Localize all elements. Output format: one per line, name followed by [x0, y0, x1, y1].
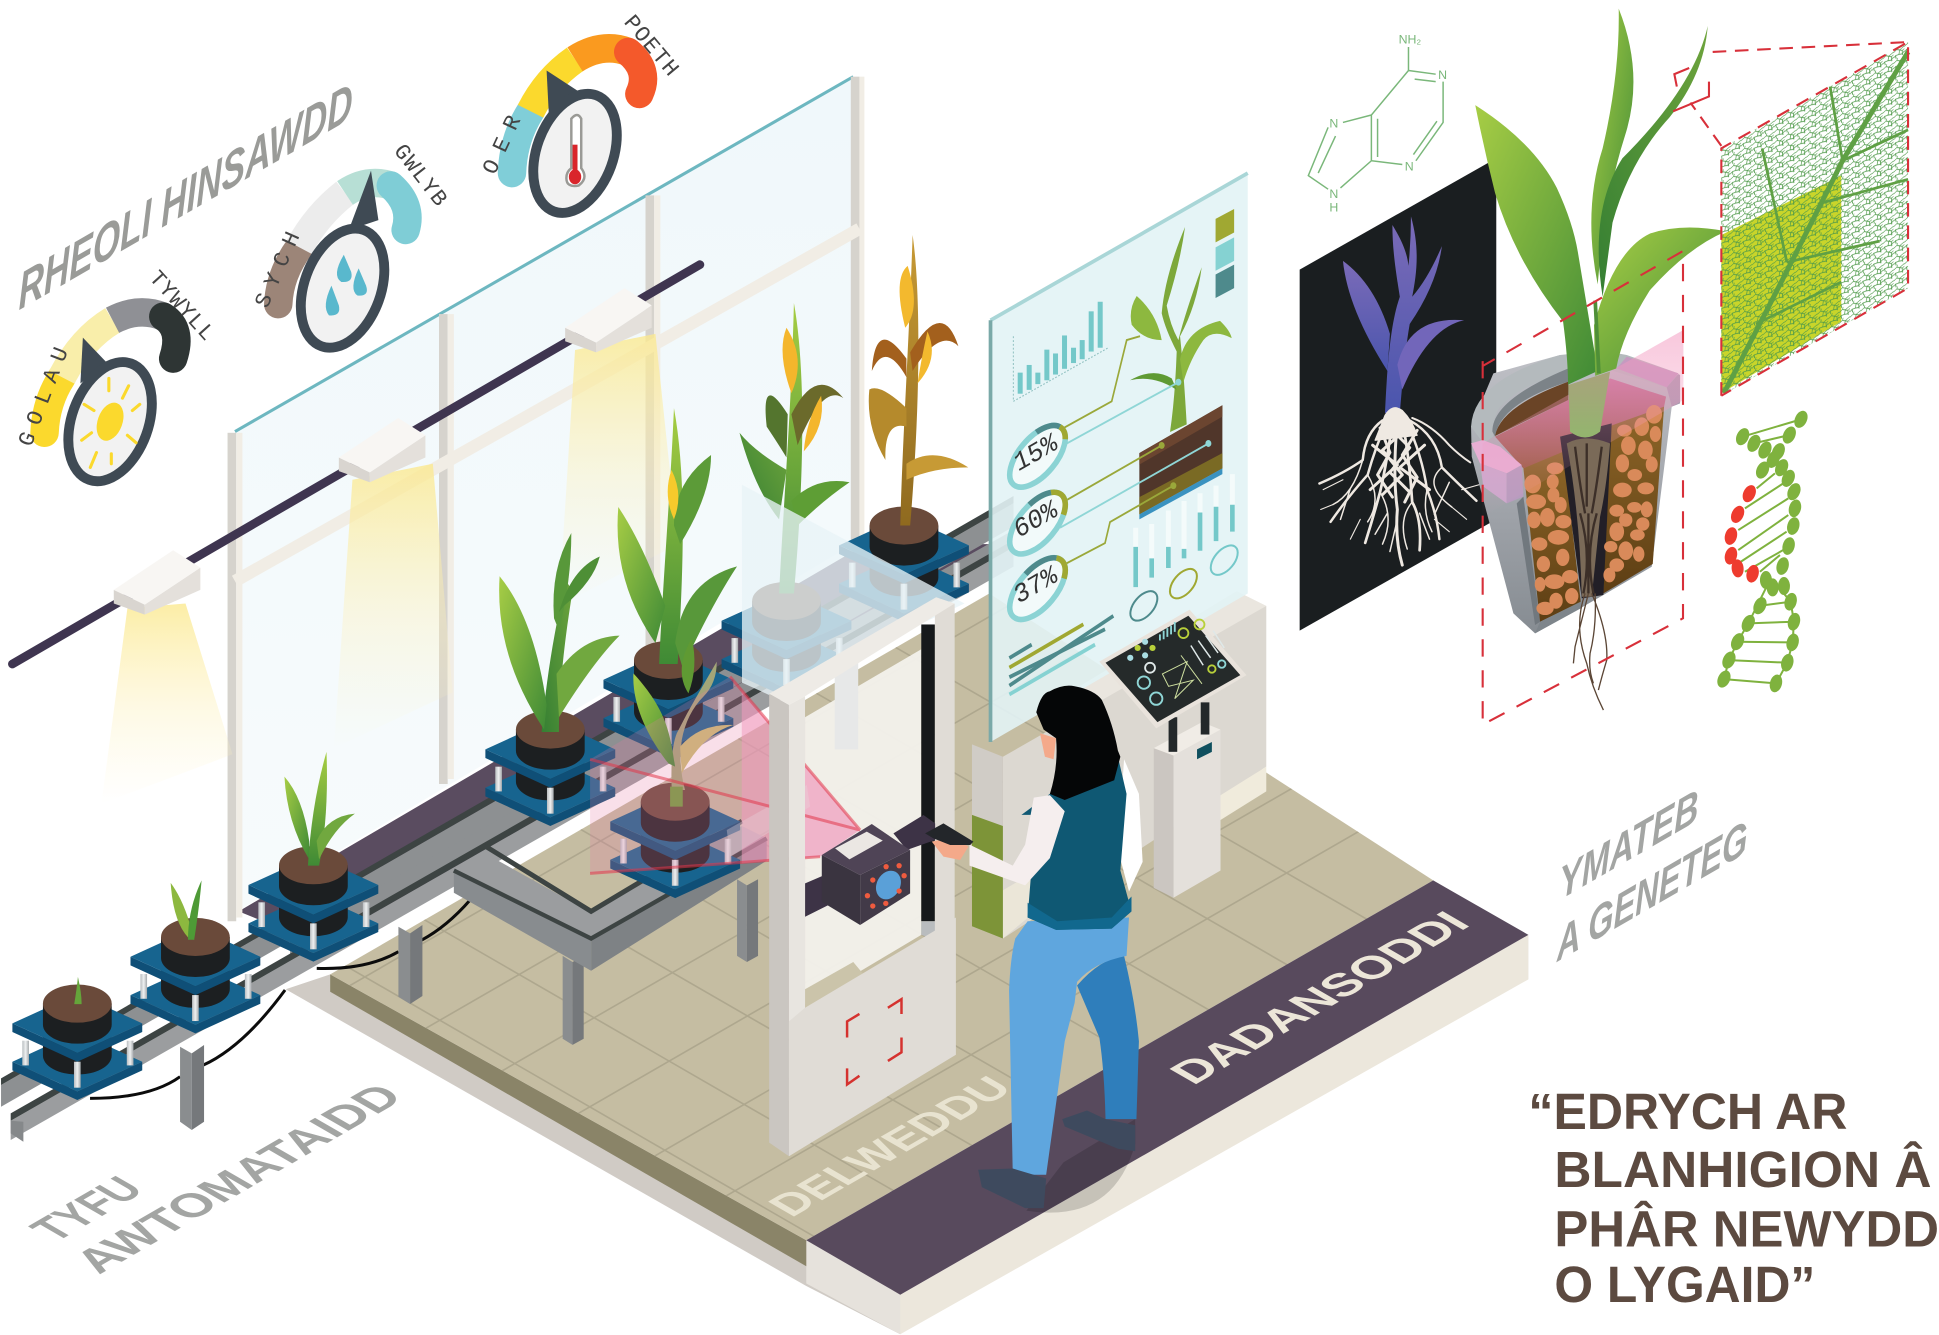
tablet — [1099, 610, 1246, 728]
lamp 3 — [565, 288, 652, 352]
scanner opening — [805, 649, 921, 1008]
scan corner marks — [847, 999, 901, 1084]
lamp 2 — [339, 418, 425, 482]
person — [925, 686, 1143, 1213]
leaf microscopy view — [1673, 42, 1908, 396]
scanner gate — [769, 597, 956, 1156]
plant stand 7 with dried plant — [839, 235, 969, 622]
level bars — [1136, 474, 1232, 587]
donut 37% — [999, 548, 1076, 629]
gauge label: GWLYB: GWLYB — [388, 139, 452, 212]
main plant leaves — [1475, 9, 1726, 385]
cutaway pot — [1471, 330, 1683, 710]
molecule: adenine: N — [1329, 187, 1338, 201]
screen plant — [1130, 227, 1232, 432]
vest — [1021, 757, 1131, 930]
right leg — [1077, 956, 1139, 1119]
hand and device — [925, 823, 973, 860]
quote: PHÂR NEWYDD — [1554, 1200, 1939, 1257]
donut 37%: 37% — [1008, 560, 1065, 610]
imaged plant stand — [610, 638, 740, 898]
donut 15%: 15% — [1008, 428, 1065, 478]
dark imaging panel — [1300, 158, 1496, 631]
leg 2 — [398, 925, 422, 1004]
lamp 1 — [114, 550, 200, 615]
gauge label: SYCH: SYCH — [250, 228, 306, 312]
plant stand 6 with maturing plant — [722, 303, 851, 697]
root mass — [1567, 438, 1610, 710]
back rail — [1, 496, 1014, 1107]
gauge: light — [45, 312, 176, 493]
light beams — [101, 334, 678, 804]
window wall — [228, 77, 1014, 946]
floor tiles — [344, 616, 1367, 1236]
arm — [970, 795, 1065, 885]
hair — [1036, 686, 1120, 800]
label: TYFU AWTOMATAIDD: AWTOMATAIDD — [62, 1077, 414, 1280]
quote — [1528, 1083, 1939, 1313]
gauge label: TYWYLL: TYWYLL — [143, 266, 220, 346]
molecule: adenine: N — [1438, 68, 1447, 82]
connector lines — [1060, 336, 1208, 564]
donut 15% — [999, 416, 1076, 497]
molecule: adenine: NH₂ — [1399, 32, 1421, 46]
gauge label: OER: OER — [477, 112, 527, 179]
camera — [805, 815, 935, 925]
label: YMATEB A GENETEG: YMATEB — [1559, 779, 1699, 910]
gauge: temperature — [512, 48, 643, 225]
back block — [972, 591, 1266, 939]
bar chart — [1013, 302, 1108, 401]
floor label: DELWEDDU: DELWEDDU — [759, 1070, 1023, 1223]
molecule: adenine — [1308, 32, 1447, 214]
front rail — [11, 540, 1014, 1142]
pebbles — [1524, 405, 1662, 615]
DNA helix — [1715, 409, 1810, 694]
gap fill — [290, 530, 1014, 957]
plant stand 3 — [248, 752, 378, 962]
shoes — [978, 1110, 1135, 1208]
left leg — [1009, 918, 1129, 1175]
quote: BLANHIGION Â — [1554, 1141, 1932, 1198]
gauge: humidity — [278, 171, 407, 359]
pink overlay — [1482, 330, 1683, 517]
label: TYFU AWTOMATAIDD: TYFU — [18, 1169, 154, 1248]
quote: “EDRYCH AR — [1528, 1083, 1847, 1140]
light rail — [12, 265, 700, 664]
imaging beam — [590, 677, 860, 873]
gauge label: GOLAU: GOLAU — [13, 344, 75, 450]
molecule: adenine: N — [1405, 160, 1414, 174]
kiosk — [1099, 610, 1246, 898]
plant stand 4 — [485, 533, 620, 826]
white roots — [1319, 408, 1479, 565]
quote: O LYGAID” — [1554, 1256, 1815, 1313]
molecule: adenine: H — [1329, 200, 1338, 214]
cables and conveyor — [1, 496, 1014, 1142]
label: YMATEB A GENETEG: A GENETEG — [1556, 809, 1747, 972]
heading: RHEOLI HINSAWDD: RHEOLI HINSAWDD — [19, 71, 353, 322]
rings — [1125, 541, 1243, 626]
data screen — [991, 173, 1248, 742]
molecule: adenine: N — [1329, 116, 1338, 130]
white coat — [1118, 759, 1143, 892]
imaged plant — [633, 638, 733, 807]
leg 1 — [180, 1045, 204, 1130]
plant stand 2 — [130, 880, 260, 1033]
translucent hood — [742, 485, 965, 695]
floor strip: analysis — [806, 880, 1528, 1295]
donut 60%: 60% — [1008, 495, 1065, 545]
plant stand 5 — [603, 408, 737, 756]
floor label: DADANSODDI: DADANSODDI — [1160, 905, 1480, 1091]
plant stand 1 — [12, 977, 142, 1100]
stem — [1568, 372, 1610, 438]
red dashed box around pot — [1483, 251, 1683, 725]
platform base — [286, 594, 1528, 1334]
gauge label: POETH: POETH — [618, 10, 684, 82]
side table — [454, 821, 767, 1045]
list bars — [1009, 616, 1113, 694]
donut 60% — [999, 483, 1076, 563]
legend squares — [1216, 209, 1234, 298]
purple plant — [1343, 216, 1464, 413]
soil layers — [1139, 405, 1222, 519]
